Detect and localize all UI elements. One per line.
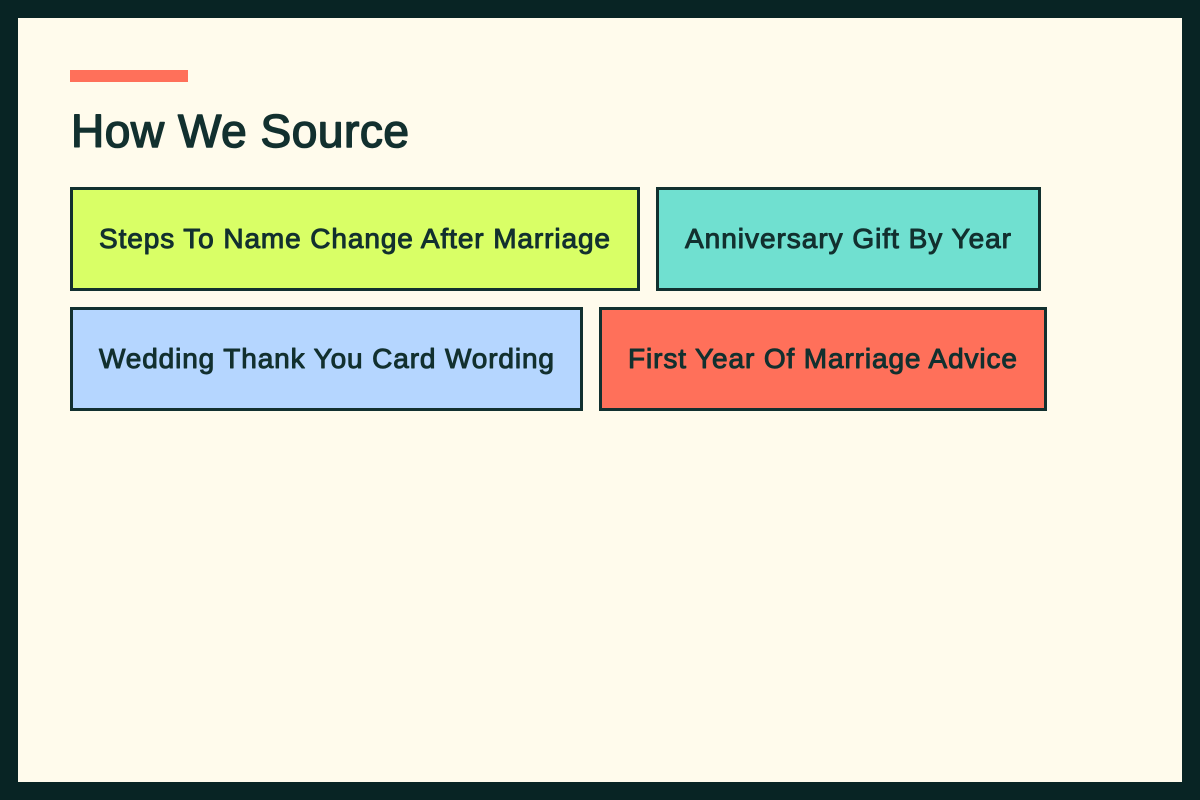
tag: Wedding Thank You Card Wording [72,308,582,410]
tag: Steps To Name Change After Marriage [72,188,638,290]
tag: Wedding Thank You Card Wording: Wedding Thank You Card Wording [99,343,554,374]
tag: Steps To Name Change After Marriage: Steps To Name Change After Marriage [99,223,610,254]
tag: First Year Of Marriage Advice: First Year Of Marriage Advice [628,343,1017,374]
tag: Anniversary Gift By Year [658,188,1040,290]
tag: First Year Of Marriage Advice [600,308,1046,410]
tag: Anniversary Gift By Year: Anniversary Gift By Year [685,223,1011,254]
accent bar [70,70,188,82]
title: How We Source [71,105,409,157]
